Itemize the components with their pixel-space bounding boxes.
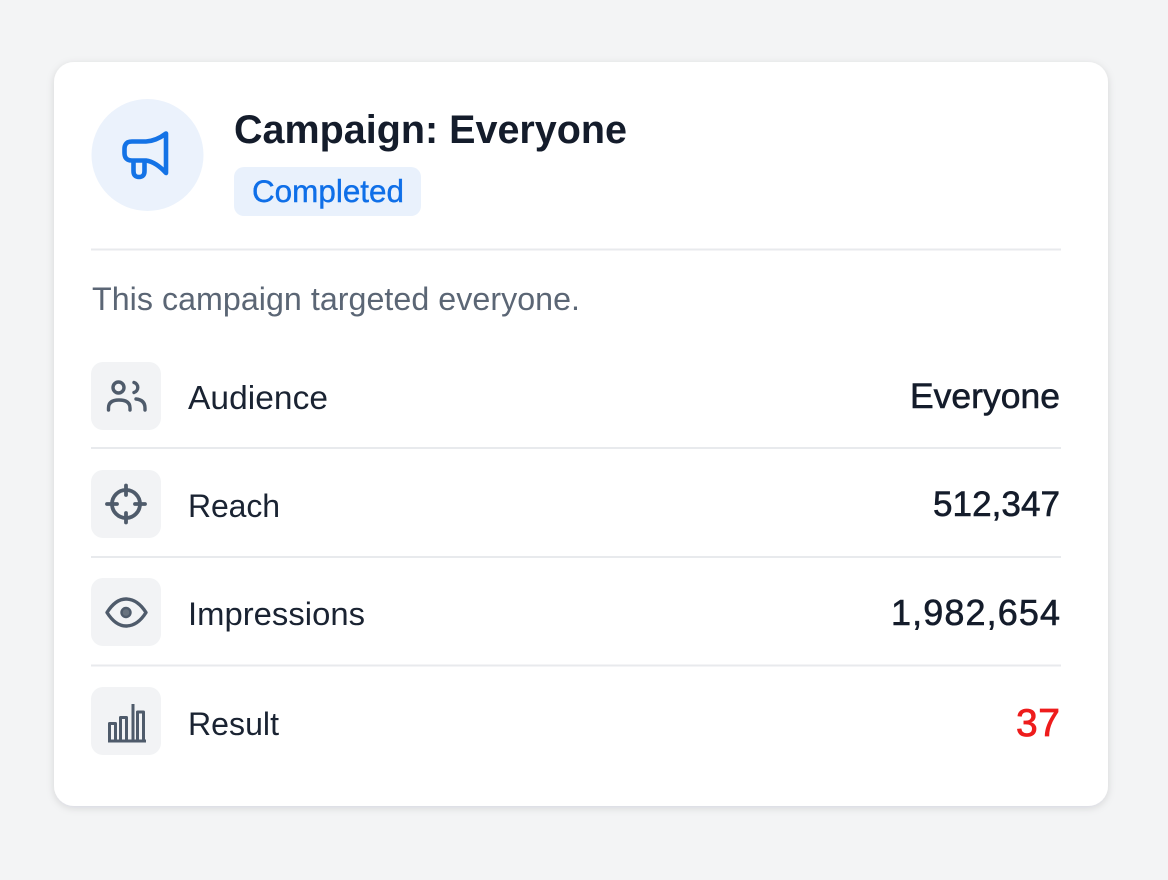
- icon: eye: [91, 578, 161, 646]
- status badge: Completed: [252, 174, 404, 209]
- row: result: [91, 687, 1060, 755]
- row: impressions: [91, 578, 1060, 646]
- title: Campaign: Everyone: [234, 108, 627, 152]
- icon: megaphone: [92, 99, 204, 211]
- label: audience: Audience: [188, 380, 328, 417]
- value: impressions: 1,982,654: [891, 592, 1060, 633]
- label: reach: Reach: [188, 488, 280, 524]
- value: audience: Everyone: [910, 376, 1060, 416]
- value: reach: 512,347: [933, 485, 1060, 524]
- label: result: Result: [188, 706, 279, 742]
- row: audience: [91, 362, 1060, 430]
- icon: target: [91, 470, 161, 538]
- row: reach: [91, 470, 1060, 538]
- icon: people: [91, 362, 161, 430]
- icon: bar chart: [91, 687, 161, 755]
- value: result: 37: [1016, 702, 1060, 745]
- status badge: [234, 167, 421, 216]
- description: This campaign targeted everyone.: [92, 281, 580, 317]
- panel: campaign card: [54, 62, 1108, 806]
- label: impressions: Impressions: [188, 595, 365, 632]
